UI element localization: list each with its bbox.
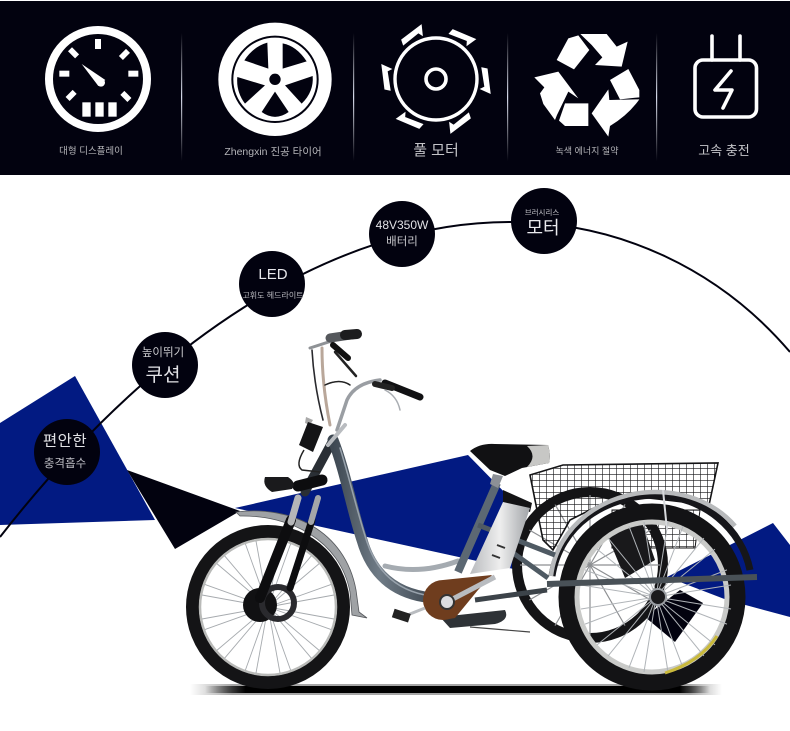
headlight <box>264 477 294 492</box>
seat tube <box>458 483 497 572</box>
label: full motor: 풀 모터 <box>413 142 459 159</box>
cargo basket <box>530 463 718 578</box>
feature: high-jump cushion: 높이뛰기 <box>142 346 184 359</box>
icon: recycling arrows <box>534 34 639 137</box>
icon: full motor <box>382 25 490 133</box>
icon: vacuum tire <box>218 23 332 136</box>
feature: brushless motor: 브러시리스 <box>525 208 559 217</box>
seat <box>470 444 550 488</box>
icon: fast charging plug <box>695 36 756 117</box>
background shapes <box>0 376 790 642</box>
header band <box>0 1 790 175</box>
front wheel <box>192 532 344 682</box>
feature: 48V350W battery <box>369 201 435 267</box>
label: fast charging: 고속 충전 <box>698 143 750 158</box>
front fork <box>260 442 332 598</box>
feature: 48V350W battery: 48V350W <box>376 218 429 232</box>
feature: comfort shock absorption: 편안한 <box>43 432 87 450</box>
feature: high-jump cushion <box>132 332 198 398</box>
feature: LED headlight: 고휘도 헤드라이트 <box>242 290 304 300</box>
crank guard and motor <box>423 575 530 632</box>
feature: comfort shock absorption: 충격흡수 <box>44 456 86 470</box>
feature: 48V350W battery: 배터리 <box>386 235 418 248</box>
label: Zhengxin vacuum tire: Zhengxin 진공 타이어 <box>224 146 322 158</box>
far rear wheel <box>517 492 663 638</box>
feature connector curve <box>0 222 790 537</box>
feature: LED headlight <box>239 251 305 317</box>
feature: comfort shock absorption <box>34 419 100 485</box>
feature: LED headlight: LED <box>258 266 288 283</box>
main frame tube <box>333 440 458 597</box>
display unit <box>299 417 323 472</box>
electric tricycle <box>192 334 757 682</box>
label: large display: 대형 디스플레이 <box>59 146 123 157</box>
rear fender and axle bar <box>475 490 757 600</box>
feature: high-jump cushion: 쿠션 <box>146 364 180 386</box>
icon: speedometer gauge <box>49 30 147 128</box>
rear frame struts <box>478 525 555 578</box>
handlebars <box>310 334 420 445</box>
battery pack <box>470 490 532 574</box>
ground shadow <box>190 684 722 695</box>
front fender <box>236 511 367 618</box>
label: green energy saving: 녹색 에너지 절약 <box>556 145 618 156</box>
rear wheel, right side <box>567 512 737 682</box>
pedal <box>392 608 425 623</box>
feature: brushless motor <box>511 188 577 254</box>
feature: brushless motor: 모터 <box>526 218 560 238</box>
